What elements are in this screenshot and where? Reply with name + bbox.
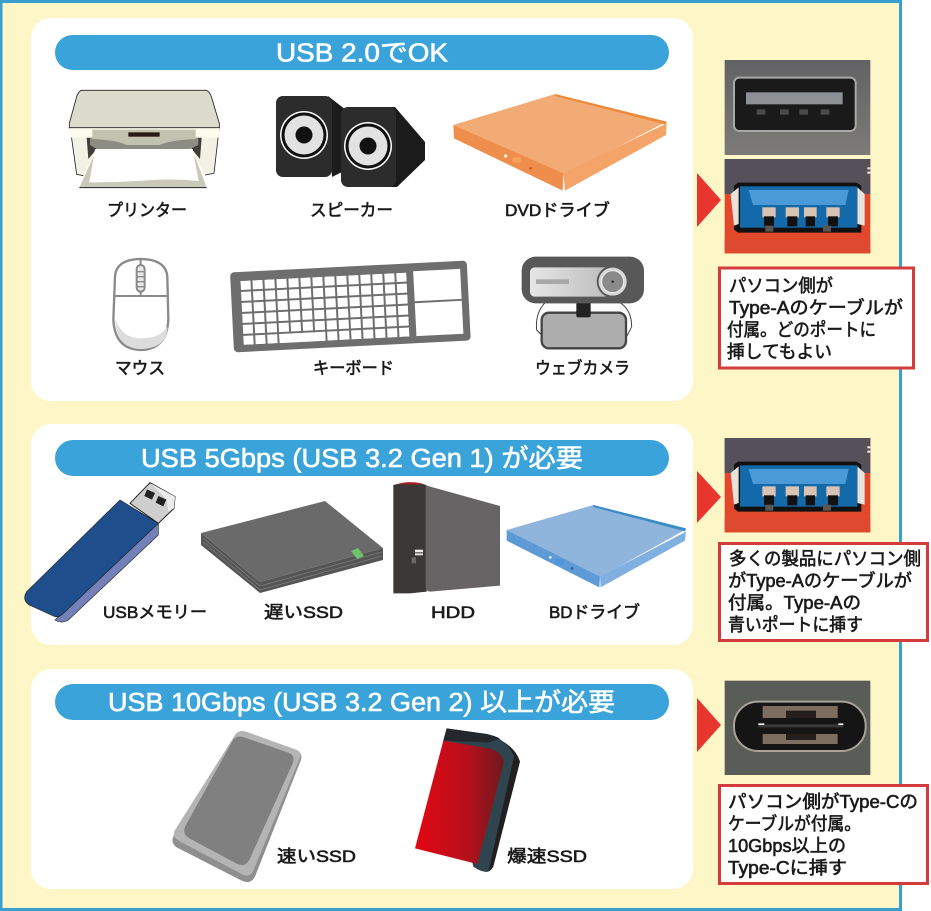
arrow: USB 2.0: [697, 173, 721, 227]
callout: USB 2.0: Type-Aのケーブルが: [729, 297, 903, 318]
heading: USB 2.0: USB 2.0でOK: [276, 40, 448, 68]
icon: HDD: [393, 482, 500, 593]
heading: USB 5Gbps: [55, 440, 669, 476]
callout: USB 10Gbps: ケーブルが付属。: [728, 813, 861, 834]
label: USB memory: USBメモリー: [103, 603, 207, 622]
icon: ultra-fast SSD: [415, 728, 520, 872]
label: fast SSD: 速いSSD: [277, 847, 356, 866]
photo: black Type-A port: [725, 60, 870, 155]
photo: blue Type-A port: [725, 159, 870, 253]
callout: USB 5Gbps: がType-Aのケーブルが: [728, 570, 912, 591]
heading: USB 2.0: [55, 35, 669, 70]
label: ultra-fast SSD: 爆速SSD: [507, 847, 587, 866]
callout: USB 5Gbps: 多くの製品にパソコン側: [729, 549, 921, 569]
label: HDD: HDD: [431, 603, 475, 622]
callout: USB 2.0: [720, 268, 914, 368]
icon: printer: [69, 90, 219, 188]
label: slow SSD: 遅いSSD: [264, 603, 343, 622]
callout: USB 10Gbps: 10Gbps以上の: [728, 836, 846, 856]
panel: USB 5Gbps: [25, 424, 693, 645]
icon: keyboard: [230, 261, 471, 352]
heading: USB 5Gbps: USB 5Gbps (USB 3.2 Gen 1) が必要: [141, 445, 583, 473]
heading: USB 10Gbps: [55, 684, 669, 720]
callout: USB 10Gbps: パソコン側がType-Cの: [728, 792, 918, 812]
callout: USB 10Gbps: Type-Cに挿す: [728, 858, 847, 878]
label: printer: プリンター: [107, 201, 187, 220]
icon: slow SSD: [201, 501, 383, 593]
photo: Type-C port: [725, 681, 870, 775]
callout: USB 5Gbps: 青いポートに挿す: [728, 615, 863, 635]
heading: USB 10Gbps: USB 10Gbps (USB 3.2 Gen 2) 以上が必要: [108, 689, 615, 717]
label: mouse: マウス: [115, 359, 165, 378]
icon: speakers: [276, 96, 425, 187]
label: BD drive: BDドライブ: [549, 602, 640, 622]
icon: webcam: [522, 257, 644, 348]
panel: USB 10Gbps: [31, 669, 693, 889]
icon: USB memory: [25, 483, 175, 622]
callout: USB 10Gbps: [720, 786, 928, 884]
arrow: USB 5Gbps: [697, 471, 721, 523]
panel: USB 2.0: [31, 18, 693, 401]
icon: fast SSD: [172, 731, 301, 882]
arrow: USB 10Gbps: [697, 698, 721, 752]
callout: USB 5Gbps: [720, 544, 928, 640]
label: keyboard: キーボード: [313, 359, 394, 378]
icon: BD drive: [507, 505, 686, 587]
callout: USB 2.0: 付属。どのポートに: [727, 320, 876, 340]
label: webcam: ウェブカメラ: [535, 358, 630, 378]
callout: USB 2.0: 挿してもよい: [727, 342, 832, 362]
photo: blue Type-A port: [725, 438, 870, 532]
callout: USB 2.0: パソコン側が: [729, 276, 833, 296]
icon: mouse: [113, 259, 168, 350]
label: speakers: スピーカー: [310, 201, 393, 220]
icon: DVD drive: [453, 94, 667, 191]
label: DVD drive: DVDドライブ: [505, 200, 610, 220]
callout: USB 5Gbps: 付属。Type-Aの: [728, 593, 861, 613]
